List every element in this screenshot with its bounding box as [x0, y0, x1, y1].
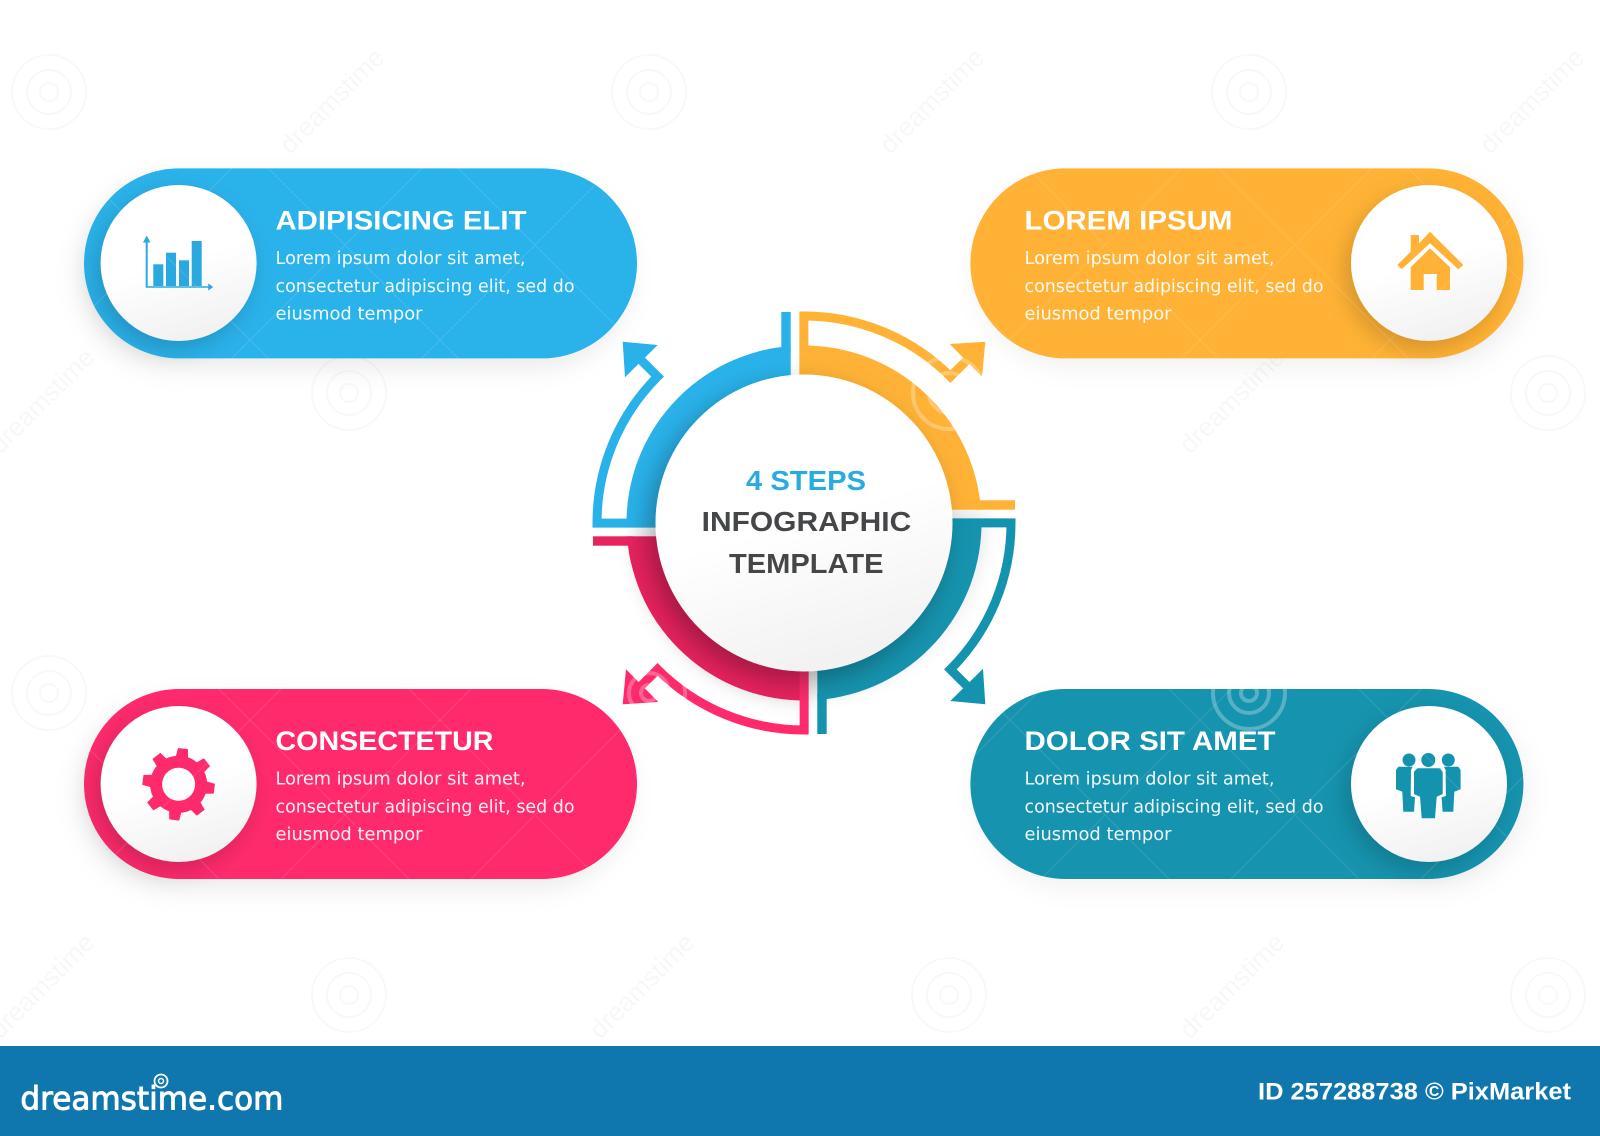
footer logo: dreamstime.com — [20, 1079, 283, 1117]
arm and arrow: blue — [597, 312, 791, 527]
image credit: ID 257288738 © PixMarket — [1258, 1078, 1571, 1105]
body text — [1024, 249, 1324, 324]
icon disc: bar chart — [101, 185, 257, 341]
body text: eiusmod tempor — [1024, 825, 1172, 845]
watermark: faint swirls and wordmarks: dreamstime — [1173, 342, 1290, 459]
arm and arrow: pink — [593, 536, 808, 730]
watermark: faint swirls and wordmarks: dreamstime — [1173, 927, 1290, 1044]
panel: lorem ipsum — [970, 168, 1523, 358]
watermark: faint swirls and wordmarks: dreamstime — [1473, 42, 1590, 159]
body text: Lorem ipsum dolor sit amet, — [1024, 249, 1274, 269]
body text: Lorem ipsum dolor sit amet, — [276, 249, 526, 269]
footer bar — [0, 1046, 1600, 1136]
body text: eiusmod tempor — [276, 825, 423, 845]
icon disc: gear — [101, 706, 257, 862]
watermark: faint swirls and wordmarks: dreamstime — [583, 927, 700, 1044]
watermark: faint swirls and wordmarks: dreamstime — [273, 42, 390, 159]
body text: Lorem ipsum dolor sit amet, — [1024, 770, 1274, 790]
heading: ADIPISICING ELIT — [276, 206, 527, 236]
body text: consectetur adipiscing elit, sed do — [276, 277, 574, 297]
panel: dolor sit amet — [970, 689, 1523, 879]
body text: consectetur adipiscing elit, sed do — [1024, 277, 1324, 297]
arm and arrow: teal — [817, 519, 1011, 734]
body text — [276, 770, 574, 845]
body text — [276, 249, 574, 324]
centre title — [702, 465, 911, 579]
heading: DOLOR SIT AMET — [1024, 726, 1276, 756]
icon: gear — [138, 744, 219, 824]
decorative white swirl overlays — [613, 357, 1285, 729]
centre title: TEMPLATE — [729, 548, 884, 579]
icon: people — [1396, 753, 1461, 818]
body text: eiusmod tempor — [1024, 304, 1172, 324]
centre title: 4 STEPS — [746, 465, 866, 496]
panel: adipisicing elit — [84, 168, 637, 358]
centre title: INFOGRAPHIC — [702, 506, 911, 537]
icon: house — [1397, 232, 1463, 290]
body text: eiusmod tempor — [276, 304, 423, 324]
arm and arrow: orange — [800, 316, 1015, 510]
heading: CONSECTETUR — [276, 726, 494, 756]
icon disc: people — [1351, 706, 1507, 862]
panel: consectetur — [84, 689, 637, 879]
body text — [1024, 770, 1324, 845]
body text: consectetur adipiscing elit, sed do — [276, 798, 574, 818]
icon disc: house — [1351, 185, 1507, 341]
heading: LOREM IPSUM — [1024, 206, 1232, 236]
body text: consectetur adipiscing elit, sed do — [1024, 798, 1324, 818]
decorative watermark lattice on panels — [90, 168, 1523, 879]
centre disc — [656, 374, 952, 672]
watermark: faint swirls and wordmarks: dreamstime — [873, 42, 990, 159]
icon: bar chart — [143, 236, 213, 290]
centre diagram — [593, 312, 1015, 734]
body text: Lorem ipsum dolor sit amet, — [276, 770, 526, 790]
